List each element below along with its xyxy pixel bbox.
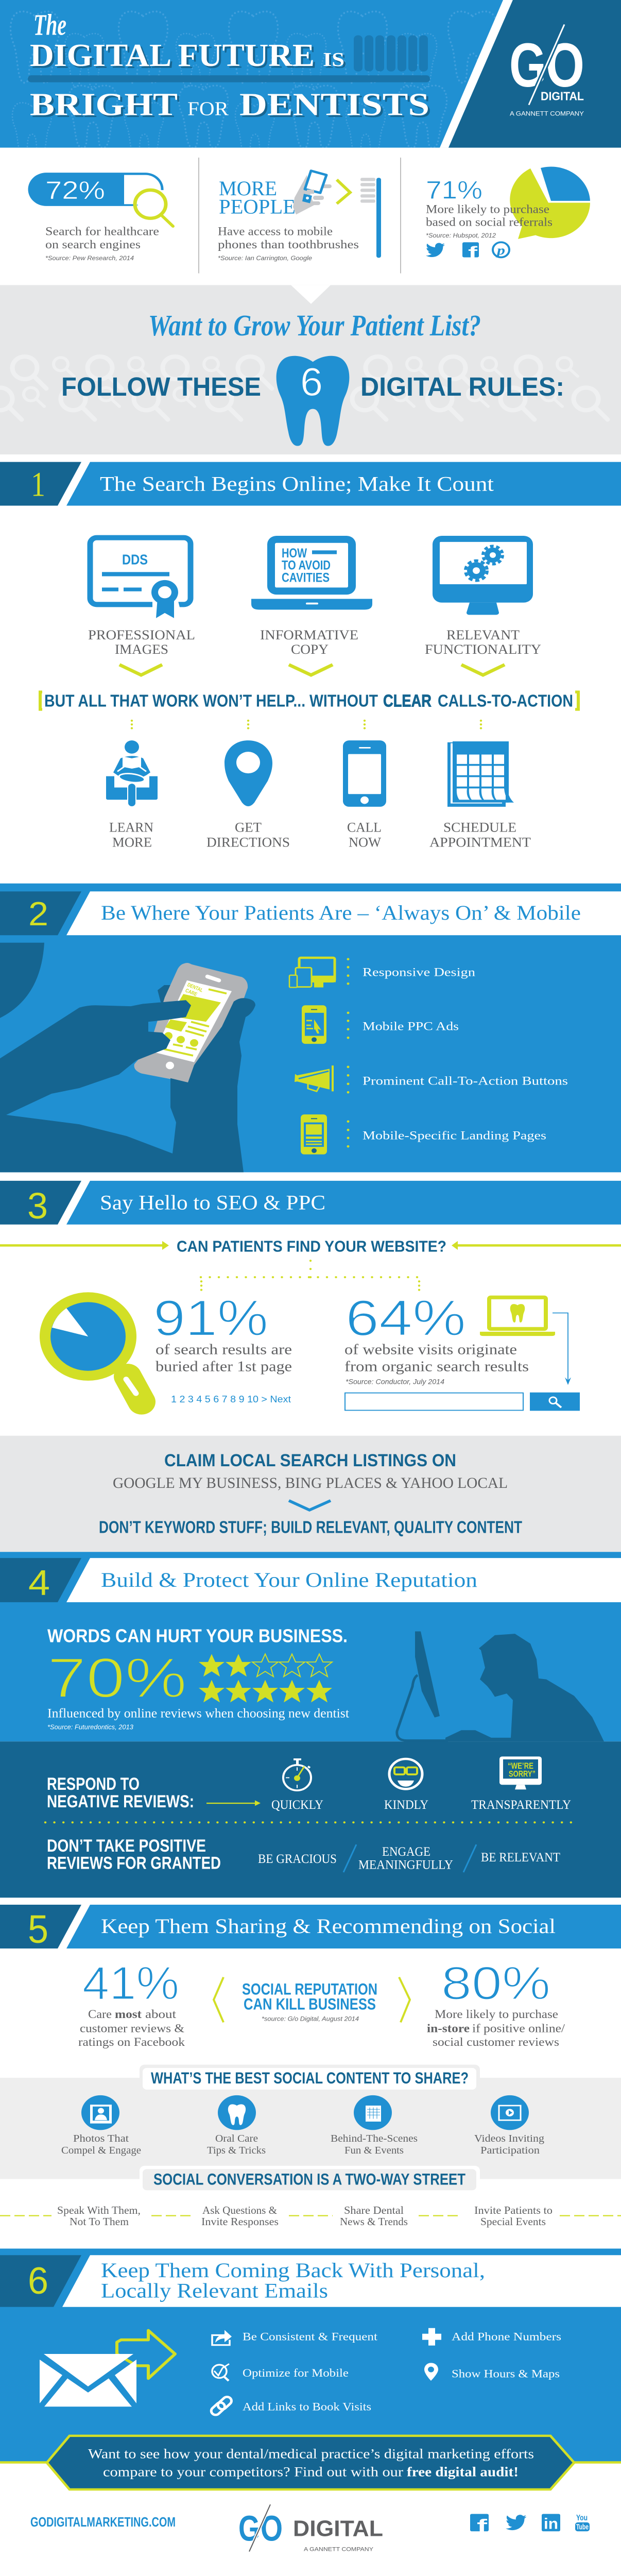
section 2 header xyxy=(0,891,621,935)
positive review tips: BE GRACIOUS xyxy=(258,1851,337,1866)
icon: facebook: f xyxy=(477,2516,488,2536)
icon: chevron xyxy=(337,180,350,204)
stat: 91 percent: 1 2 3 4 5 6 7 8 9 10 > Next xyxy=(171,1395,291,1405)
title: DENTISTS xyxy=(239,87,429,123)
call to action banner xyxy=(0,2436,621,2489)
heading: respond to negative reviews: RESPOND TO xyxy=(47,1774,140,1794)
label: relevant functionality xyxy=(425,628,541,657)
icon: youtube: Tube xyxy=(576,2523,589,2531)
logo panel xyxy=(440,0,621,148)
conversation tips row: Share Dental xyxy=(344,2204,404,2216)
stat: more people: Have access to mobile xyxy=(218,225,333,238)
section 6 header: Locally Relevant Emails xyxy=(101,2279,328,2302)
stat: more people: phones than toothbrushes xyxy=(218,238,359,251)
panel: best social content xyxy=(0,2064,621,2179)
positive review tips: ENGAGE xyxy=(382,1844,430,1859)
section 4 panel: Influenced by online reviews when choosing new dentist xyxy=(47,1706,350,1720)
conversation tips row: Speak With Them, xyxy=(57,2204,141,2216)
list item: hours and maps xyxy=(424,2363,560,2381)
item: kindly: KINDLY xyxy=(384,1797,428,1811)
section 3 header: Say Hello to SEO & PPC xyxy=(100,1191,325,1214)
icon: share xyxy=(212,2330,232,2345)
label: get directions xyxy=(206,820,290,850)
stat: 72 percent: *Source: Pew Research, 2014 xyxy=(45,254,134,262)
local listings panel: GOOGLE MY BUSINESS, BING PLACES & YAHOO LOCAL xyxy=(113,1475,508,1492)
icon: map pin xyxy=(225,740,272,806)
illustration: hand holding phone: DENTAL xyxy=(186,982,204,993)
heading: words can hurt: WORDS CAN HURT YOUR BUSINESS. xyxy=(47,1625,348,1647)
item: transparently xyxy=(471,1756,571,1811)
icon: pinterest xyxy=(493,242,509,258)
stat: 71 percent xyxy=(426,167,590,261)
list item: consistent xyxy=(212,2330,378,2345)
icon: laptop xyxy=(251,536,372,609)
item: oral care xyxy=(207,2095,266,2156)
icon: hand holding phone xyxy=(293,171,332,214)
toothbrush bristles xyxy=(354,35,428,72)
section 4 panel xyxy=(0,1552,621,1897)
illustration: hand holding phone xyxy=(0,943,255,1172)
stat: 80 percent: 80% xyxy=(441,1957,550,2010)
calls-to-action banner: BUT ALL THAT WORK WON’T HELP... WITHOUT xyxy=(44,692,378,710)
item: oral care: Oral Care xyxy=(215,2132,258,2144)
item: behind the scenes: Fun & Events xyxy=(344,2144,404,2156)
conversation tips row: Special Events xyxy=(480,2215,546,2228)
star ratings xyxy=(199,1654,332,1702)
item: photos: Photos That xyxy=(73,2132,129,2144)
icon: toothbrush xyxy=(360,178,381,258)
icon: facebook xyxy=(470,2514,489,2536)
conversation tips row: News & Trends xyxy=(340,2215,408,2228)
list item: call-to-action buttons: Prominent Call-To-Action Buttons xyxy=(363,1075,568,1088)
icon: monitor with apology xyxy=(499,1756,542,1789)
icon: smartphone xyxy=(343,740,386,807)
footer logo xyxy=(238,2504,383,2552)
icon: pinterest: p xyxy=(496,243,505,258)
stat: 71 percent: 71% xyxy=(426,175,482,204)
title: FOR xyxy=(187,97,229,120)
label: professional images: IMAGES xyxy=(115,642,168,657)
stat: 71 percent: based on social referrals xyxy=(426,215,553,229)
illustration: hand holding phone: CARE xyxy=(184,988,198,997)
label: get directions: DIRECTIONS xyxy=(206,835,290,850)
list item: phone numbers xyxy=(422,2328,561,2346)
footer logo: G xyxy=(238,2509,260,2549)
logo panel: DIGITAL xyxy=(541,90,584,103)
stat: 80 percent: in-store xyxy=(427,2022,470,2035)
list item: mobile ppc ads xyxy=(302,1005,459,1044)
title xyxy=(30,8,429,123)
stat: 71 percent: More likely to purchase xyxy=(426,203,549,216)
item: videos: Videos Inviting xyxy=(474,2132,544,2144)
local listings panel xyxy=(0,1436,621,1552)
footer logo: A GANNETT COMPANY xyxy=(304,2547,373,2552)
list item: consistent: Be Consistent & Frequent xyxy=(243,2330,378,2343)
toothbrush handle xyxy=(28,75,430,82)
section 6 header xyxy=(0,2255,621,2307)
conversation tips row: Invite Responses xyxy=(201,2215,279,2228)
icon: calendar xyxy=(447,741,514,807)
section 2 header: Be Where Your Patients Are – ‘Always On’ & Mobile xyxy=(101,902,581,925)
stat: 91 percent: 91% xyxy=(153,1290,268,1346)
call to action banner: free digital audit! xyxy=(407,2465,519,2480)
stat: 71 percent: *Source: Hubspot, 2012 xyxy=(426,232,496,239)
conversation tips row: Ask Questions & xyxy=(202,2204,277,2216)
section 5 header: Keep Them Sharing & Recommending on Social xyxy=(101,1915,556,1938)
illustration: person at computer xyxy=(397,1632,604,1741)
footer logo: DIGITAL xyxy=(293,2515,383,2541)
list item: links: Add Links to Book Visits xyxy=(243,2401,371,2413)
stat: more people xyxy=(218,171,381,262)
section 6 header: Keep Them Coming Back With Personal, xyxy=(101,2259,485,2282)
section 1 header: The Search Begins Online; Make It Count xyxy=(100,472,494,496)
icon: person reading xyxy=(106,740,158,807)
conversation tips row: Not To Them xyxy=(70,2215,129,2228)
callout: social reputation: CAN KILL BUSINESS xyxy=(244,1995,376,2013)
title: IS xyxy=(323,48,344,70)
label: learn more: MORE xyxy=(112,835,152,850)
call to action banner: compare to your competitors? Find out with our xyxy=(103,2465,403,2480)
section 4 panel: *Source: Futuredontics, 2013 xyxy=(47,1723,134,1731)
list item: phone numbers: Add Phone Numbers xyxy=(452,2330,561,2343)
label: call now: NOW xyxy=(349,835,382,850)
arrow xyxy=(206,1800,261,1806)
item: quickly: QUICKLY xyxy=(271,1797,323,1811)
label: relevant functionality: RELEVANT xyxy=(446,628,520,643)
icon: laptop: TO AVOID xyxy=(282,559,331,572)
calls-to-action banner: CLEAR xyxy=(383,692,432,710)
stat: 41 percent: about xyxy=(145,2008,176,2021)
section 4 header: Build & Protect Your Online Reputation xyxy=(101,1569,477,1591)
calls-to-action banner: CALLS-TO-ACTION xyxy=(438,692,573,710)
heading: respond to negative reviews xyxy=(47,1774,194,1811)
label: call now xyxy=(347,820,382,850)
conversation tips row xyxy=(0,2204,621,2228)
icon: facebook xyxy=(462,242,479,261)
stat: more people: PEOPLE xyxy=(219,195,296,218)
list item: call-to-action buttons xyxy=(295,1065,568,1093)
stat: 64 percent: of website visits originate xyxy=(344,1342,517,1358)
section 3 header xyxy=(0,1181,621,1226)
section 6 header: 6 xyxy=(28,2260,48,2302)
stat: 64 percent: 64% xyxy=(346,1290,466,1346)
icon: certificate xyxy=(90,538,191,618)
stat: 64 percent: *Source: Conductor, July 2014 xyxy=(346,1378,444,1386)
search box xyxy=(345,1393,580,1411)
icon: facebook: f xyxy=(468,244,477,261)
icon: youtube xyxy=(575,2514,590,2531)
item: transparently: TRANSPARENTLY xyxy=(471,1797,571,1811)
label: informative copy: COPY xyxy=(291,642,329,657)
heading: two-way street xyxy=(140,2166,480,2194)
icon: laptop: CAVITIES xyxy=(282,571,330,585)
stat: 72 percent: 72% xyxy=(45,176,105,205)
stat: 80 percent: if positive online/ xyxy=(472,2022,565,2035)
chevrons xyxy=(119,665,505,675)
footer xyxy=(30,2504,590,2552)
logo panel: A GANNETT COMPANY xyxy=(510,110,584,117)
stat: 41 percent: Care xyxy=(88,2008,112,2021)
section 5 header: 5 xyxy=(28,1907,48,1952)
stat: 72 percent: Search for healthcare xyxy=(45,225,159,238)
heading with arrows: CAN PATIENTS FIND YOUR WEBSITE? xyxy=(177,1238,446,1255)
list item: optimize for mobile: Optimize for Mobile xyxy=(243,2367,349,2379)
icon: monitor with apology: SORRY” xyxy=(509,1769,536,1778)
stat: 91 percent: buried after 1st page xyxy=(156,1359,292,1375)
icon: laptop with tooth xyxy=(480,1297,555,1336)
icon: responsive devices xyxy=(289,958,336,988)
arrow xyxy=(553,1313,571,1385)
heading: don't take positive reviews for granted xyxy=(47,1835,221,1873)
stat: 80 percent: social customer reviews xyxy=(433,2036,559,2049)
title: The xyxy=(33,8,66,42)
section 3 header: 3 xyxy=(27,1185,48,1226)
pie chart xyxy=(510,167,590,239)
stat: more people: *Source: Ian Carrington, Google xyxy=(218,254,312,262)
positive review tips: MEANINGFULLY xyxy=(358,1857,453,1872)
section 3 content xyxy=(0,1238,621,1411)
script heading: Want to Grow Your Patient List? xyxy=(148,309,481,342)
callout: social reputation: SOCIAL REPUTATION xyxy=(242,1980,377,1998)
logo panel: O xyxy=(546,30,584,100)
label: schedule appointment: APPOINTMENT xyxy=(429,835,531,850)
call to action banner: Want to see how your dental/medical practice’s digital marketing efforts xyxy=(88,2447,534,2462)
stat: 41 percent: ratings on Facebook xyxy=(78,2036,185,2049)
section 2 panel xyxy=(0,884,621,1172)
item: photos: Compel & Engage xyxy=(61,2144,141,2156)
icon: phone with landing page xyxy=(301,1114,327,1155)
header banner xyxy=(0,0,621,156)
icon: twitter xyxy=(426,243,445,257)
heading: don't take positive reviews for granted: DON’T TAKE POSITIVE xyxy=(47,1835,206,1855)
icon: youtube: You xyxy=(576,2514,588,2522)
icon: stopwatch xyxy=(283,1758,311,1790)
label: informative copy xyxy=(260,628,358,657)
item: kindly xyxy=(384,1759,428,1811)
icon: linkedin: in xyxy=(544,2516,558,2532)
label: informative copy: INFORMATIVE xyxy=(260,628,358,643)
icon: twitter xyxy=(506,2515,527,2530)
icon: smiley with glasses xyxy=(389,1759,422,1789)
section 5 content xyxy=(0,1957,621,2228)
title: BRIGHT xyxy=(30,87,178,123)
local listings panel: CLAIM LOCAL SEARCH LISTINGS ON xyxy=(164,1450,456,1470)
stat: 72 percent xyxy=(28,173,173,262)
list item: mobile ppc ads: Mobile PPC Ads xyxy=(363,1020,459,1033)
label: learn more: LEARN xyxy=(109,820,153,835)
label: relevant functionality: FUNCTIONALITY xyxy=(425,642,541,657)
panel: best social content: WHAT’S THE BEST SOCIAL CONTENT TO SHARE? xyxy=(151,2069,469,2087)
icon: tooth with 6 xyxy=(277,356,349,446)
icon: chain link xyxy=(210,2395,233,2416)
list item: responsive design xyxy=(289,958,476,988)
section 1 header: 1 xyxy=(31,465,45,504)
heading with arrows xyxy=(0,1238,621,1255)
section 1 header xyxy=(0,462,621,506)
label: schedule appointment: SCHEDULE xyxy=(443,820,516,835)
icon: monitor with apology: “WE’RE xyxy=(508,1761,533,1771)
list item: landing pages: Mobile-Specific Landing Pages xyxy=(363,1129,546,1142)
callout: social reputation: *source: G/o Digital, August 2014 xyxy=(262,2015,359,2022)
item: oral care: Tips & Tricks xyxy=(207,2144,266,2156)
section 2 header: 2 xyxy=(28,895,48,933)
section 6 panel xyxy=(0,2248,621,2463)
list item: optimize for mobile xyxy=(212,2364,349,2381)
heading: respond to negative reviews: NEGATIVE REVIEWS: xyxy=(47,1791,194,1811)
icon: laptop: HOW xyxy=(282,547,307,561)
positive review tips xyxy=(258,1844,560,1872)
callout: social reputation xyxy=(214,1977,410,2022)
item: videos xyxy=(474,2095,544,2156)
logo panel: G xyxy=(509,30,546,100)
stat: more people: MORE xyxy=(219,177,277,200)
icon: email with arrow xyxy=(40,2330,175,2406)
list item: hours and maps: Show Hours & Maps xyxy=(452,2368,560,2380)
stat strip xyxy=(0,148,621,285)
title: DIGITAL FUTURE xyxy=(30,38,315,73)
section 4 header xyxy=(0,1558,621,1603)
icon: magnifier pie chart xyxy=(40,1292,142,1402)
item: behind the scenes: Behind-The-Scenes xyxy=(331,2132,418,2144)
label: professional images: PROFESSIONAL xyxy=(88,628,195,643)
stat: 91 percent: of search results are xyxy=(156,1342,292,1358)
heading: don't take positive reviews for granted: REVIEWS FOR GRANTED xyxy=(47,1853,221,1873)
item: behind the scenes xyxy=(331,2095,418,2156)
icon: chevron xyxy=(289,1501,331,1510)
item: photos xyxy=(61,2095,141,2156)
section 4 header: 4 xyxy=(28,1563,50,1603)
list item: links xyxy=(210,2395,371,2416)
heading: follow these: FOLLOW THESE xyxy=(61,372,261,401)
positive review tips: BE RELEVANT xyxy=(481,1850,560,1865)
list item: responsive design: Responsive Design xyxy=(363,966,476,979)
icon: magnifier with graph xyxy=(212,2364,229,2381)
heading: digital rules: DIGITAL RULES: xyxy=(360,372,564,401)
heading: two-way street: SOCIAL CONVERSATION IS A TWO-WAY STREET xyxy=(153,2171,465,2188)
item: videos: Participation xyxy=(480,2144,540,2156)
stat: 91 percent xyxy=(153,1290,292,1405)
stat: 64 percent xyxy=(344,1290,529,1386)
icon: plus xyxy=(422,2328,441,2346)
footer logo: O xyxy=(261,2509,283,2549)
section 5 header xyxy=(0,1905,621,1952)
grow your patient list panel xyxy=(0,285,621,454)
stat: 80 percent xyxy=(427,1957,565,2049)
icon: certificate: DDS xyxy=(122,552,148,568)
label: get directions: GET xyxy=(235,820,262,835)
stat: 41 percent: most xyxy=(115,2008,142,2021)
website address: GODIGITALMARKETING.COM xyxy=(30,2515,176,2530)
stat: 72 percent: on search engines xyxy=(45,238,141,251)
stat: 41 percent: 41% xyxy=(82,1957,179,2010)
stat: 64 percent: from organic search results xyxy=(344,1359,529,1375)
section 1 content xyxy=(40,536,578,850)
icon: monitor with gears xyxy=(433,536,533,615)
social icons xyxy=(470,2514,590,2536)
stat: 80 percent: More likely to purchase xyxy=(435,2008,558,2021)
icon: tooth with 6: 6 xyxy=(300,360,323,404)
label: learn more xyxy=(109,820,153,850)
icon: megaphone xyxy=(295,1065,334,1091)
label: professional images xyxy=(88,628,195,657)
label: schedule appointment xyxy=(429,820,531,850)
item: quickly xyxy=(271,1758,323,1811)
list item: landing pages xyxy=(301,1114,546,1155)
stat: 41 percent xyxy=(78,1957,185,2049)
conversation tips row: Invite Patients to xyxy=(474,2204,553,2216)
icon: phone with cursor xyxy=(302,1005,326,1044)
label: call now: CALL xyxy=(347,820,382,835)
icon: pin xyxy=(424,2363,438,2381)
stat: 41 percent: customer reviews & xyxy=(80,2022,184,2035)
stat: 70 percent: 70% xyxy=(47,1647,187,1709)
